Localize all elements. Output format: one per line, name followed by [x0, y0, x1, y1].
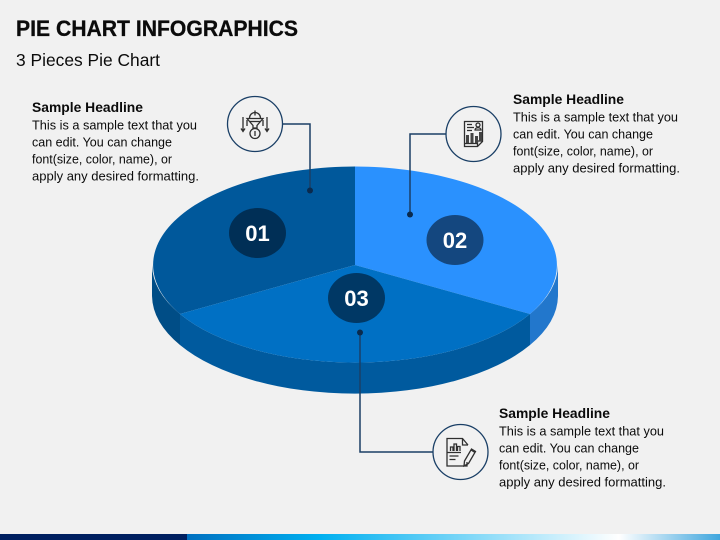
- text block: bottom right headline: Sample Headline: [499, 406, 610, 421]
- text block: top right headline: [513, 92, 680, 176]
- side: right slice: [530, 265, 558, 345]
- slice 03 top: [180, 265, 530, 363]
- text block: top right headline: This is a sample text that you: [513, 110, 678, 124]
- slice 02 top: [355, 166, 557, 314]
- text block: left headline: font(size, color, name), or: [32, 152, 172, 166]
- connector 02: [407, 134, 446, 218]
- text block: top right headline: Sample Headline: [513, 92, 624, 107]
- text block: left headline: Sample Headline: [32, 100, 143, 115]
- slice 01 top: [153, 166, 355, 314]
- icon: document with pencil: [433, 424, 488, 480]
- subtitle: 3 Pieces Pie Chart: [16, 50, 160, 70]
- badge 02: [426, 215, 484, 265]
- text block: left headline: apply any desired formatting.: [32, 170, 199, 184]
- side: bottom slice: [180, 314, 530, 394]
- report bars: [466, 132, 482, 143]
- badge 02: 02: [443, 228, 467, 253]
- badge 03: 03: [344, 286, 369, 311]
- text block: bottom right headline: [499, 406, 666, 490]
- icon: report document: [446, 106, 501, 162]
- text block: left headline: This is a sample text that you: [32, 118, 197, 132]
- text block: bottom right headline: apply any desired formatting.: [499, 476, 666, 490]
- badge 01: 01: [245, 221, 270, 246]
- footer bar: [0, 534, 720, 540]
- connector 03: [357, 330, 433, 452]
- side: left slice: [152, 265, 180, 345]
- text block: left headline: [32, 100, 199, 184]
- icon: money funnel: [228, 96, 282, 152]
- text block: top right headline: font(size, color, name), or: [513, 144, 653, 158]
- text block: top right headline: can edit. You can change: [513, 128, 653, 142]
- pie chart: [152, 166, 558, 394]
- title: PIE CHART INFOGRAPHICS: [16, 16, 298, 41]
- connector 01: [283, 124, 313, 194]
- text block: bottom right headline: This is a sample text that you: [499, 424, 664, 438]
- badge 01: [229, 208, 286, 258]
- badge 03: [328, 273, 385, 323]
- text block: bottom right headline: can edit. You can change: [499, 442, 639, 456]
- text block: top right headline: apply any desired formatting.: [513, 162, 680, 176]
- text block: bottom right headline: font(size, color, name), or: [499, 458, 639, 472]
- text block: left headline: can edit. You can change: [32, 136, 172, 150]
